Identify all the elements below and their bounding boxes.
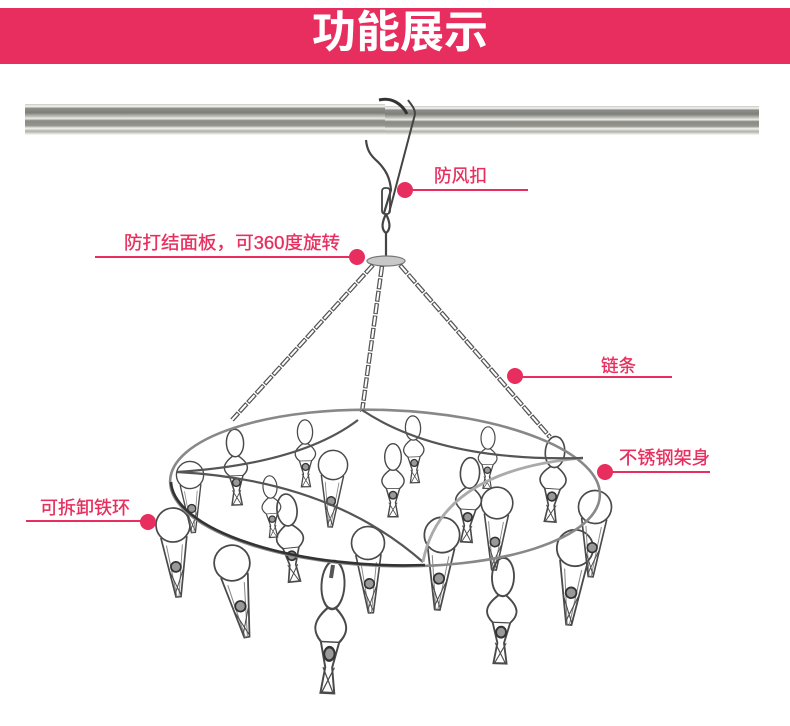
callout: 链条: 链条 — [601, 356, 636, 376]
callout: 防打结面板: 防打结面板，可360度旋转 — [124, 233, 340, 253]
title: 功能展示 — [312, 8, 488, 57]
callout: 可拆卸铁环 — [26, 498, 156, 530]
callout: 不锈钢架身: 不锈钢架身 — [619, 448, 710, 468]
drying rail — [25, 104, 759, 135]
callout: 防风扣: 防风扣 — [434, 166, 487, 186]
hook and swivel — [366, 99, 415, 260]
header band — [0, 8, 790, 64]
callout: 链条 — [507, 356, 672, 384]
callout: 可拆卸铁环: 可拆卸铁环 — [40, 498, 130, 518]
callout: 防风扣 — [397, 166, 528, 198]
callout: 不锈钢架身 — [597, 448, 710, 480]
swivel plate — [367, 256, 405, 266]
callout: 防打结面板 — [95, 233, 365, 265]
chains — [232, 265, 550, 437]
back row of clips — [223, 415, 569, 583]
stainless steel frame — [167, 403, 603, 578]
front row of clips — [155, 461, 613, 694]
